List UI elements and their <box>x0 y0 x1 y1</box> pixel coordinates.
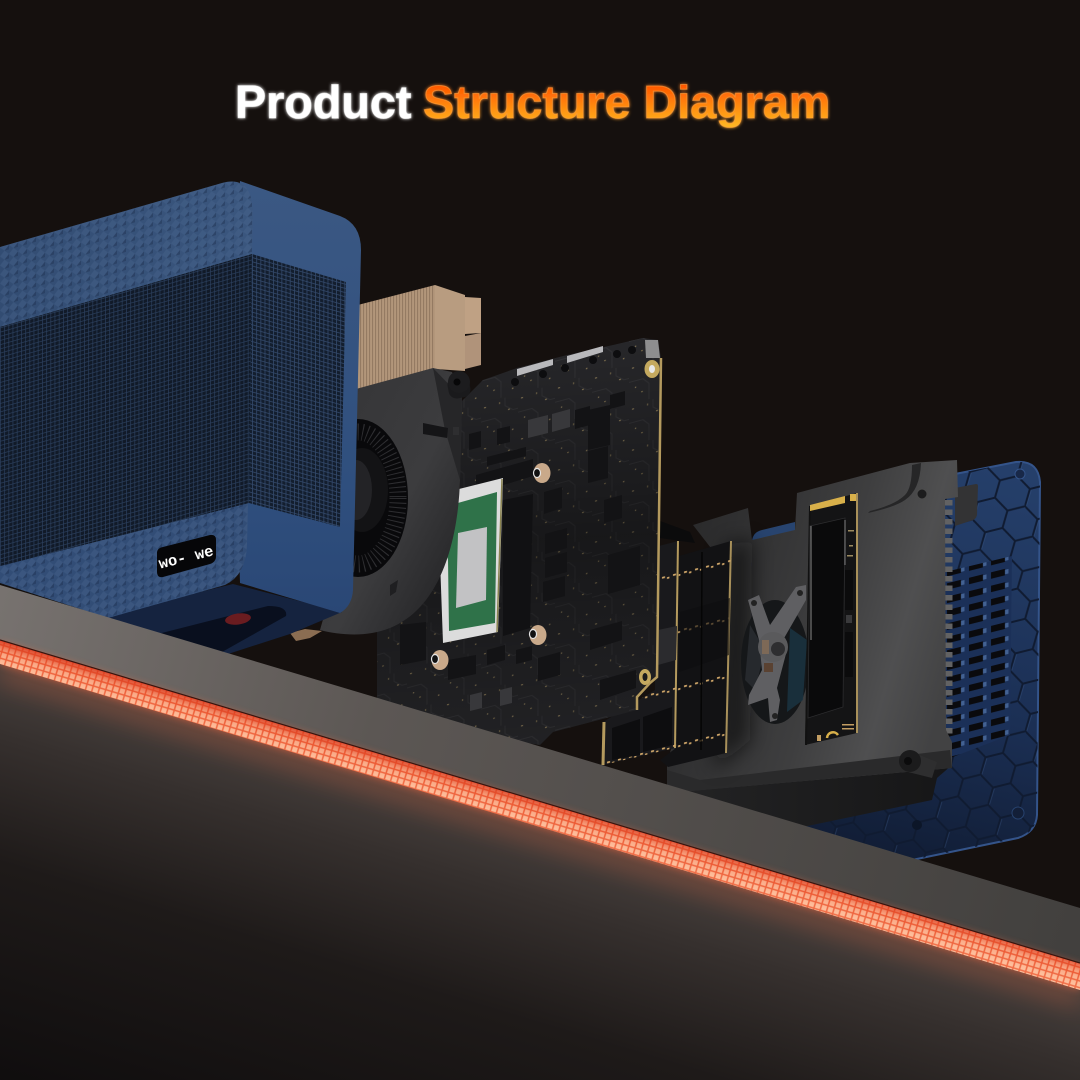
metal bracket plate with M.2 SSD and small fan <box>667 460 958 829</box>
connector jacks <box>511 346 636 386</box>
blower fan <box>290 368 472 641</box>
board chips <box>400 391 640 700</box>
lug <box>899 750 937 778</box>
case underside <box>100 584 342 655</box>
motherboard <box>377 338 661 745</box>
fan lugs <box>390 371 472 596</box>
fan opening <box>308 419 408 577</box>
CPU <box>435 478 503 643</box>
board gold edge <box>637 358 661 710</box>
table lower surface <box>0 664 1080 1080</box>
mesh front <box>0 254 252 566</box>
RAM module rear <box>660 541 731 767</box>
plate body <box>667 460 958 793</box>
board dark zones <box>503 494 533 636</box>
fin comb <box>944 500 952 736</box>
table upper band <box>0 585 1080 963</box>
LED strip <box>0 640 1080 1006</box>
panel window <box>955 484 978 526</box>
title word: Product: Product <box>235 76 411 128</box>
screw holes <box>1015 469 1025 479</box>
copper foot <box>290 629 322 641</box>
RAM module front <box>603 541 678 765</box>
title words: Structure Diagram: Structure Diagram <box>423 76 830 128</box>
SSD label <box>808 518 845 718</box>
small fan <box>741 585 809 724</box>
standoffs <box>432 360 660 685</box>
case side face <box>232 181 361 613</box>
brand plate <box>157 535 216 577</box>
dark tube behind RAM <box>660 521 695 543</box>
plate lower bar <box>667 765 952 829</box>
underside red button <box>224 612 252 626</box>
fan mounting bracket <box>748 585 806 722</box>
case front face top <box>0 182 253 327</box>
M.2 SSD <box>805 493 857 745</box>
silver connectors <box>517 359 553 376</box>
blue mini PC case <box>0 181 361 655</box>
SSD gold contacts <box>810 496 845 511</box>
copper heatsink <box>350 285 481 392</box>
case front face bottom <box>0 503 248 618</box>
RAM shadow on plate <box>715 540 752 770</box>
blue honeycomb back panel <box>752 462 1040 860</box>
fan blades <box>318 432 398 564</box>
title <box>235 76 830 128</box>
fan hub <box>336 448 388 532</box>
vent slots <box>945 556 1012 760</box>
underside dark panel <box>150 606 286 652</box>
RAM slot pads <box>470 409 570 711</box>
mesh side <box>249 254 346 527</box>
brand text: wo- we <box>157 542 215 573</box>
